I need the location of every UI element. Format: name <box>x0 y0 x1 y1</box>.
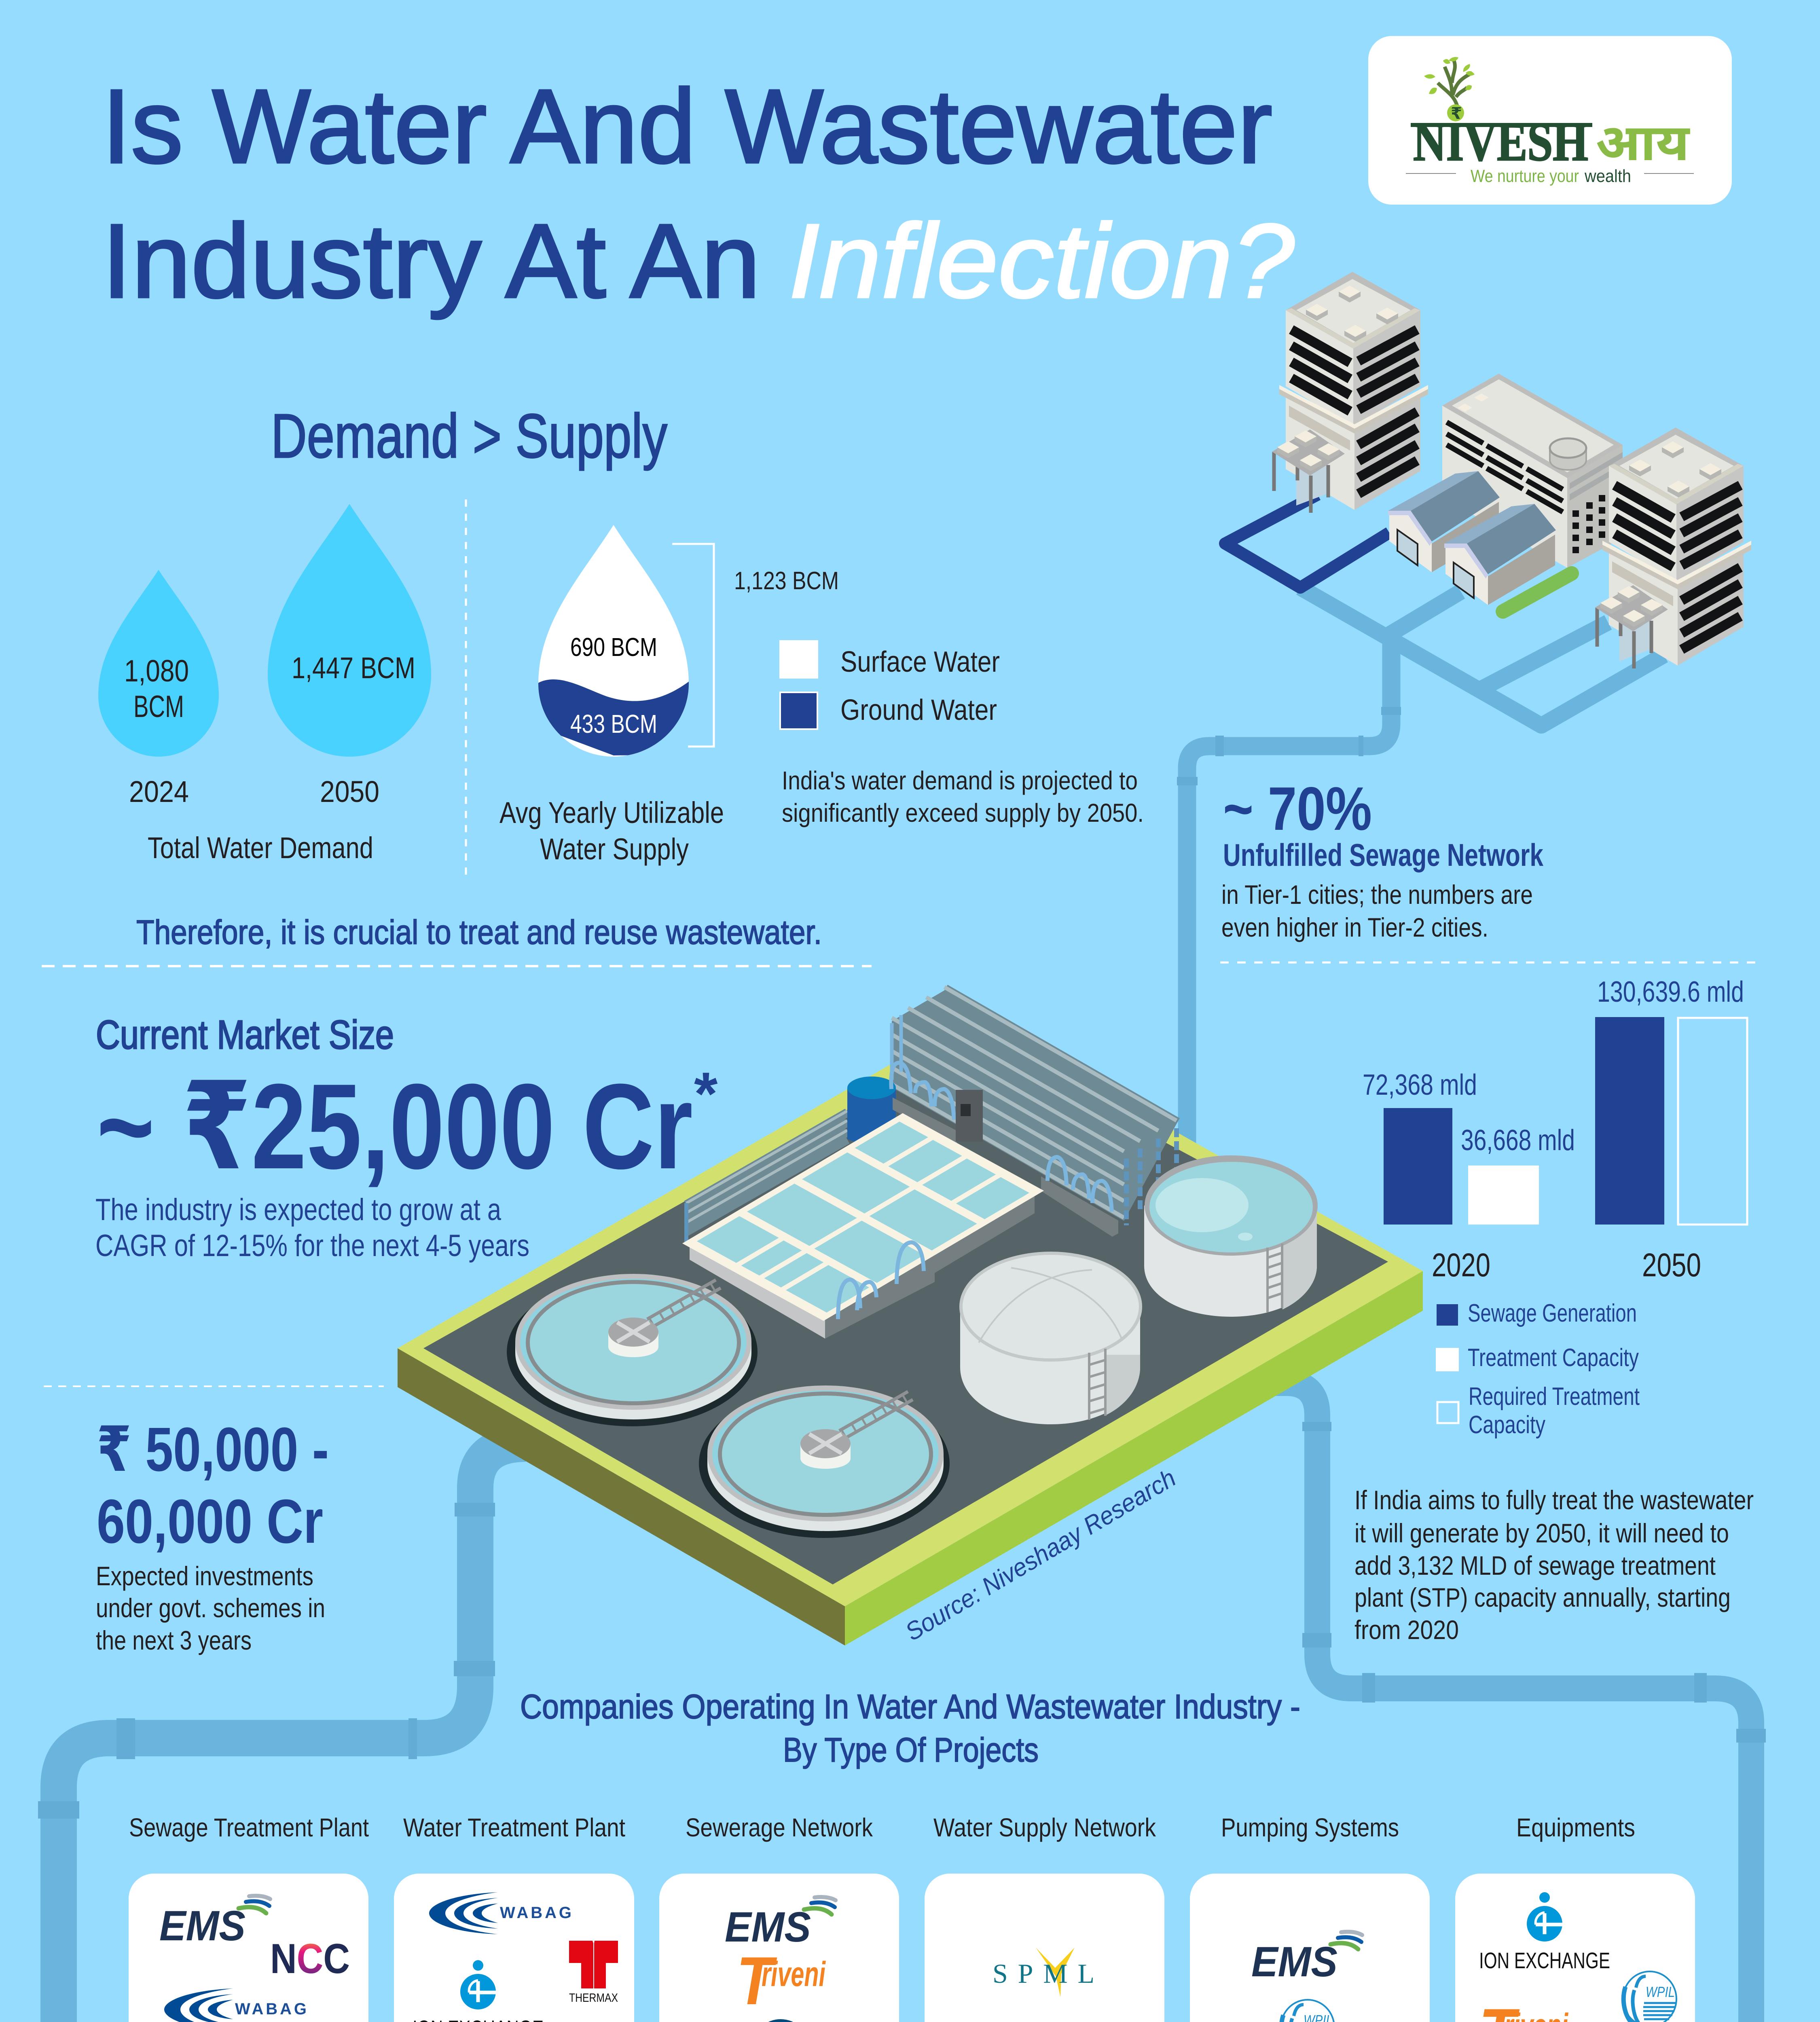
building: second warehouse <box>1444 504 1556 605</box>
logo: SPML: SPML <box>993 1958 1094 1989</box>
bars 2020: 36,668 mld <box>1461 1124 1575 1157</box>
note: STP capacity: If India aims to fully treat the wastewater <box>1354 1485 1754 1515</box>
demand year labels <box>129 775 379 865</box>
treatment plant illustration <box>398 987 1423 1646</box>
title: Industry At An <box>102 203 760 320</box>
logo card <box>1368 36 1732 205</box>
category labels: Water Treatment Plant <box>403 1813 625 1842</box>
platform <box>398 1017 1423 1646</box>
bars 2020: 2020 <box>1432 1247 1490 1284</box>
building: tower left <box>1272 272 1428 513</box>
logo tagline: wealth <box>1584 166 1631 186</box>
u-pipes group right <box>1041 1157 1118 1237</box>
open water tank <box>1144 1155 1318 1317</box>
card: water supply network <box>925 1874 1164 2022</box>
card: pumping systems <box>1190 1874 1430 2022</box>
bracket: total supply <box>672 544 839 747</box>
legend: water source <box>779 640 1000 729</box>
investment block: under govt. schemes in <box>96 1593 325 1623</box>
hedge <box>1503 573 1572 611</box>
bars 2050 <box>1595 976 1747 1284</box>
card: water treatment plant <box>394 1874 634 2022</box>
pipe: upper network from buildings <box>1177 588 1664 1173</box>
drop: 2024 demand <box>98 570 219 757</box>
investment block: Expected investments <box>96 1561 313 1591</box>
market size block: ~ ₹25,000 Cr <box>97 1058 693 1194</box>
legend: sewage chart: Sewage Generation <box>1468 1299 1637 1327</box>
logo tree icon <box>1424 57 1475 123</box>
logo: WPIL: WPIL <box>1646 1984 1675 2000</box>
logo: Triveni <box>1479 1995 1568 2022</box>
sewage network stat: even higher in Tier-2 cities. <box>1221 912 1488 942</box>
logo: WABAG <box>429 1892 571 1934</box>
legend: water source: Ground Water <box>840 694 997 726</box>
supply caption: Avg Yearly Utilizable <box>499 796 724 829</box>
category labels: Pumping Systems <box>1221 1813 1399 1842</box>
source note: Source: Niveshaay Research <box>901 1464 1181 1646</box>
logo: WABAG: WABAG <box>500 1904 571 1922</box>
u-pipes group front <box>825 1242 935 1339</box>
logo: Ion Exchange <box>1479 1892 1610 1973</box>
sewage network stat: Unfulfilled Sewage Network <box>1223 837 1543 873</box>
bars 2050: 2050 <box>1642 1247 1701 1284</box>
logo: L&T <box>753 2020 808 2022</box>
heading: companies <box>520 1688 1300 1769</box>
bar chart: sewage vs capacity <box>1363 976 1747 1284</box>
bars 2020 <box>1363 1069 1575 1284</box>
market size block: CAGR of 12-15% for the next 4-5 years <box>95 1229 529 1263</box>
note: demand exceeds supply <box>782 766 1144 827</box>
logo tree icon: ₹ <box>1451 105 1462 123</box>
note: demand exceeds supply: India's water demand is projected to <box>782 766 1138 795</box>
sewage network stat: ~ 70% <box>1223 774 1372 843</box>
pipe: left network <box>38 1444 526 2022</box>
building: long mid block <box>1442 374 1623 568</box>
logo: Ion Exchange <box>413 1960 544 2022</box>
legend: sewage chart: Required Treatment <box>1469 1383 1640 1411</box>
market size block: Current Market Size <box>96 1012 394 1058</box>
left tube bundle <box>686 1111 847 1244</box>
category labels: Water Supply Network <box>933 1813 1156 1842</box>
heading: demand supply: Demand > Supply <box>271 401 667 471</box>
logo: EMS: EMS <box>159 1902 245 1950</box>
drop: utilizable supply: 690 BCM <box>570 632 657 662</box>
card: sewerage network <box>659 1874 899 2022</box>
logo: Thermax: THERMAX <box>569 1991 618 2005</box>
sewage network stat: in Tier-1 cities; the numbers are <box>1221 880 1533 909</box>
investment block: 60,000 Cr <box>97 1487 323 1556</box>
heading: companies: By Type Of Projects <box>783 1731 1039 1769</box>
category labels: Sewerage Network <box>686 1813 873 1842</box>
market size block: The industry is expected to grow at a <box>95 1193 502 1227</box>
title: Is Water And Wastewater <box>102 68 1272 185</box>
drop: 2050 demand <box>268 504 431 757</box>
legend: water source: Surface Water <box>840 646 1000 678</box>
drop: 2050 demand: 1,447 BCM <box>292 651 415 685</box>
legend: sewage chart: Capacity <box>1469 1411 1545 1439</box>
u-pipes group back <box>891 1063 957 1143</box>
drop: utilizable supply: 433 BCM <box>570 709 657 738</box>
legend: sewage chart <box>1436 1299 1640 1439</box>
note: STP capacity: it will generate by 2050, it will need to <box>1354 1518 1729 1548</box>
title: Inflection? <box>789 203 1295 320</box>
demand year labels: 2024 <box>129 775 189 808</box>
logo tagline: We nurture your <box>1471 166 1579 186</box>
back membrane tube bundle <box>892 987 1177 1225</box>
bracket: total supply: 1,123 BCM <box>734 567 839 595</box>
supply caption <box>499 796 724 866</box>
aeration basin grid <box>690 1117 1037 1339</box>
market size block <box>95 1012 718 1263</box>
sewage network stat <box>1221 774 1543 942</box>
card: equipments <box>1455 1874 1695 2022</box>
drop: utilizable supply <box>536 525 692 757</box>
legend: sewage chart: Treatment Capacity <box>1468 1344 1639 1372</box>
drop: 2024 demand: 1,080 <box>124 654 189 688</box>
logo: Triveni: riveni <box>762 1955 826 1994</box>
logo wordmark: आय <box>1596 114 1690 171</box>
card: sewage treatment plant <box>129 1874 368 2022</box>
category labels: Equipments <box>1516 1813 1635 1842</box>
category labels: Sewage Treatment Plant <box>129 1813 369 1842</box>
logo: NCC: NCC <box>270 1935 350 1982</box>
note: demand exceeds supply: significantly exceed supply by 2050. <box>782 798 1144 827</box>
logo: WPIL <box>1281 2000 1334 2022</box>
logo: EMS: EMS <box>725 1904 811 1951</box>
logo: Triveni: T <box>736 1943 777 2019</box>
logo: WABAG: WABAG <box>235 2000 307 2018</box>
control box <box>956 1090 983 1142</box>
clarifier two <box>699 1385 950 1538</box>
domed storage tank <box>960 1253 1141 1424</box>
building: tower right <box>1595 427 1751 668</box>
market size block: * <box>694 1060 718 1127</box>
logo wordmark: NIVESH <box>1413 112 1588 172</box>
clarifier one <box>507 1274 758 1426</box>
note: STP capacity: plant (STP) capacity annually, starting <box>1354 1582 1731 1612</box>
blue tank <box>847 1077 896 1148</box>
supply caption: Water Supply <box>540 832 689 866</box>
logo: EMS: EMS <box>1251 1938 1337 1986</box>
demand year labels: 2050 <box>320 775 379 808</box>
pipe: right network <box>1262 1383 1766 2022</box>
logo: WPIL <box>1623 1971 1676 2022</box>
logo: SPML <box>993 1948 1094 1997</box>
investment block <box>96 1415 329 1655</box>
bars 2020: 72,368 mld <box>1363 1069 1477 1101</box>
logo: WABAG <box>164 1988 307 2022</box>
logo: Thermax <box>569 1941 618 2005</box>
investment block: ₹ 50,000 - <box>97 1415 329 1484</box>
logo: Triveni <box>736 1943 826 2019</box>
demand year labels: Total Water Demand <box>148 831 373 865</box>
logo tagline <box>1406 166 1694 186</box>
note: STP capacity <box>1354 1485 1754 1645</box>
drop: 2024 demand: BCM <box>133 690 184 724</box>
title <box>102 68 1295 320</box>
statement: treat and reuse: Therefore, it is crucial to treat and reuse wastewater. <box>136 913 822 951</box>
category labels <box>129 1813 1635 1842</box>
building: warehouses <box>1388 471 1500 572</box>
note: STP capacity: from 2020 <box>1354 1615 1459 1645</box>
note: STP capacity: add 3,132 MLD of sewage treatment <box>1354 1550 1716 1580</box>
heading: companies: Companies Operating In Water And Wastewater Industry - <box>520 1688 1300 1726</box>
bars 2050: 130,639.6 mld <box>1597 976 1744 1008</box>
navy pipe at buildings <box>1225 495 1389 588</box>
logo: Ion Exchange: ION EXCHANGE <box>1479 1948 1610 1973</box>
investment block: the next 3 years <box>96 1625 252 1655</box>
